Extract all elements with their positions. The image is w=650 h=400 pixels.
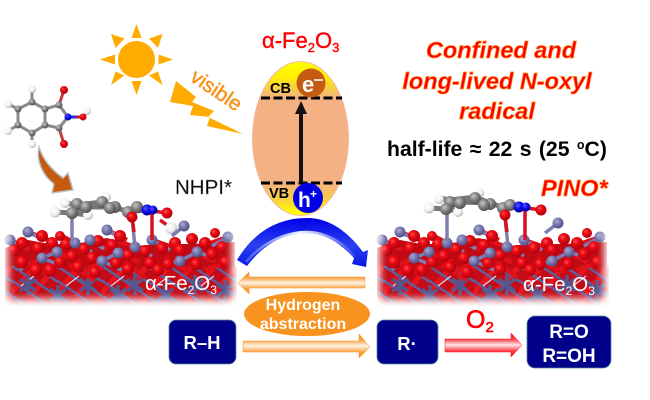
box: products [527,316,611,368]
arrow: orange leftward [238,272,365,294]
label: O2: 2 [485,319,494,336]
box: R-H: R–H [183,332,221,353]
box: R-H [169,320,236,364]
title: alpha-Fe2O3: 2 [308,40,315,55]
title: alpha-Fe2O3: O [315,28,332,53]
label: alpha-Fe2O3 left: O [194,272,210,295]
slab: left surface [4,224,237,306]
excitation arrow [295,101,307,183]
label: alpha-Fe2O3 right: 2 [566,284,573,298]
heading: confined radical: long-lived N-oxyl [402,68,592,94]
heading: confined radical: Confined and [426,37,577,63]
CB label: CB [270,81,291,97]
box: products: R=OH [542,346,596,367]
arrow: adsorption [38,147,73,193]
text: half-life: o [577,138,585,152]
arrow: red [445,333,522,357]
label: alpha-Fe2O3 right: O [572,273,588,296]
label: NHPI*: NHPI* [175,176,232,199]
electron [296,68,326,98]
callout: hydrogen abstraction [244,292,370,336]
label: alpha-Fe2O3 right: α-Fe [523,273,566,296]
band diagram [252,62,348,216]
heading: confined radical: radical [459,98,535,124]
VB label: VB [269,186,289,202]
box: R radical [377,320,438,364]
title: alpha-Fe2O3: 3 [332,40,339,55]
electron: e [302,72,314,97]
slab: right surface [376,224,609,306]
icon: sun [100,24,173,95]
hole [293,183,323,213]
molecule: NHPI on surface [50,192,190,247]
arrow: blue arc [237,218,368,267]
label: alpha-Fe2O3 left: 3 [210,283,217,297]
label: PINO*: PINO* [541,175,609,201]
molecule: PINO on surface [424,188,564,246]
text: half-life: C) [585,138,607,161]
text: half-life: half-life ≈ 22 s (25 [387,138,569,161]
molecule: NHPI [4,85,91,148]
icon: lightning bolt [170,81,243,134]
label: visible: visible [186,65,246,116]
box: products: R=O [549,322,589,343]
callout: hydrogen abstraction: Hydrogen [266,297,340,314]
box: R radical: R· [397,333,417,354]
arrow: orange rightward [243,334,370,358]
hole: h [298,189,311,212]
label: alpha-Fe2O3 left: 2 [188,283,195,297]
label: alpha-Fe2O3 left: α-Fe [145,272,188,295]
title: alpha-Fe2O3: α-Fe [262,28,308,53]
hole: + [310,187,317,201]
label: O2: O [466,306,485,334]
callout: hydrogen abstraction: abstraction [260,316,346,333]
heading: confined radical [402,37,592,124]
label: alpha-Fe2O3 right: 3 [588,284,595,298]
